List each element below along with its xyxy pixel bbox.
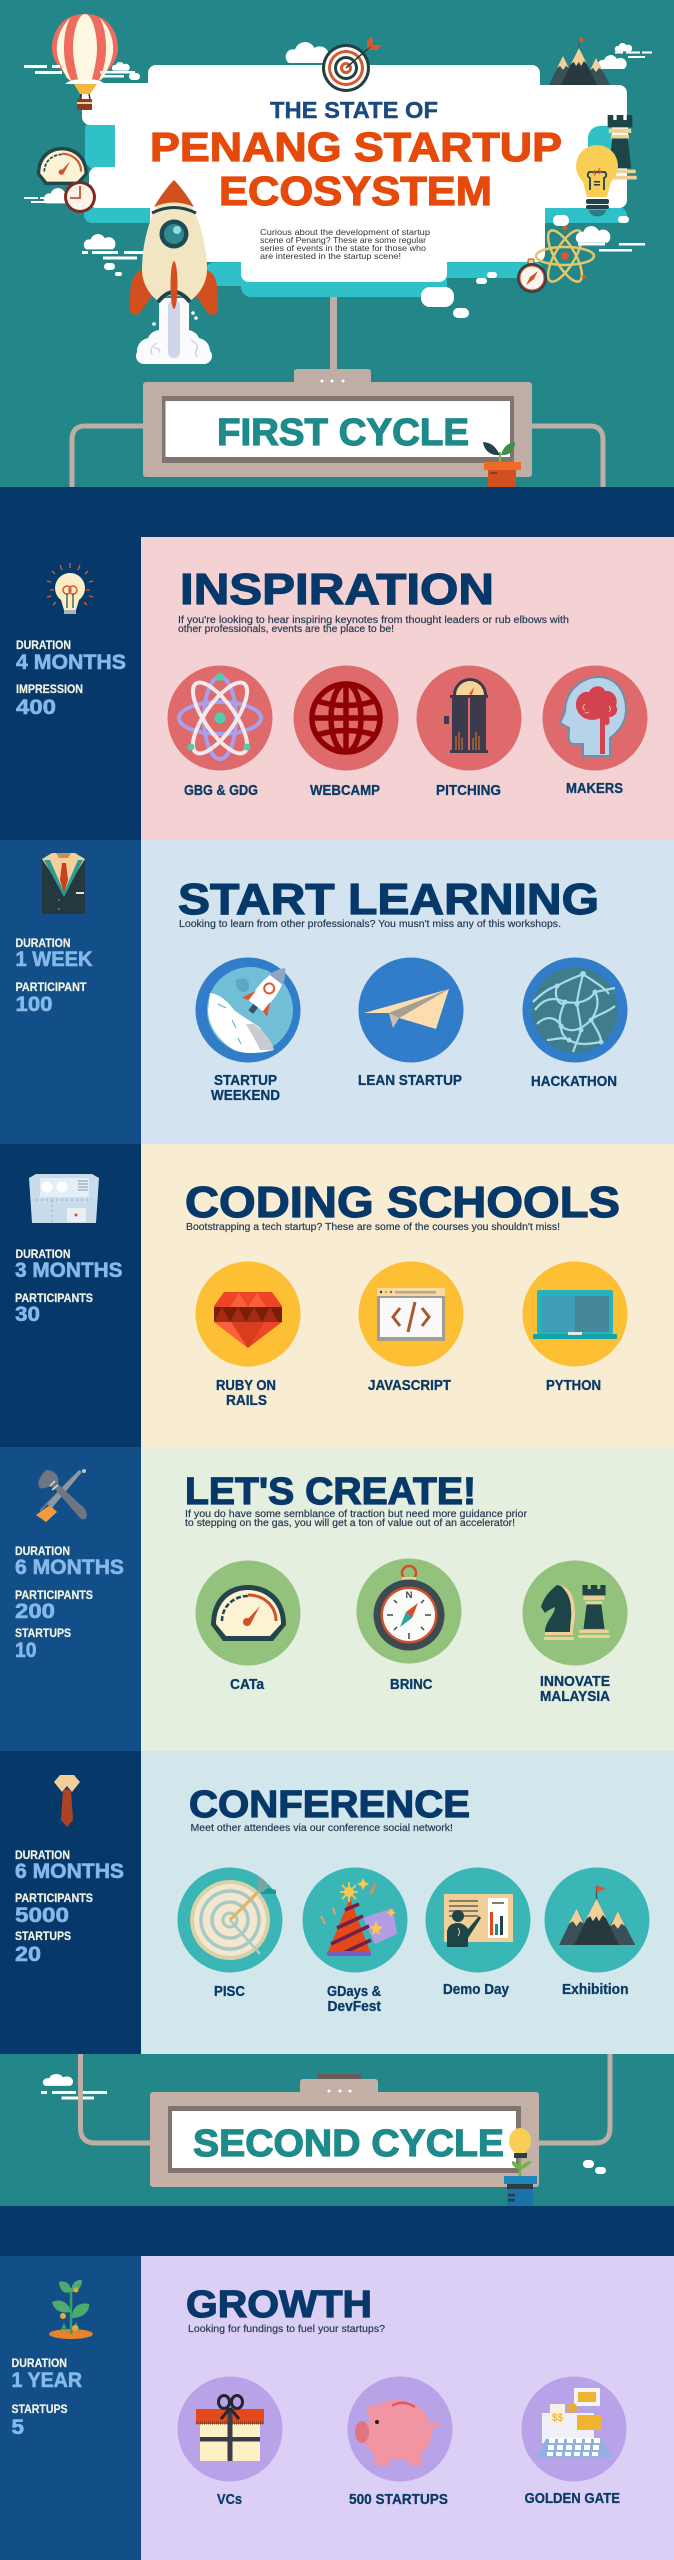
item: startup weekend rocket [196, 958, 300, 1062]
stats: start learning: 100 [16, 993, 52, 1016]
icon: bulb plant [504, 2128, 537, 2206]
heading: start learning: START LEARNING [178, 875, 599, 924]
intro text: are interested in the startup scene! [260, 251, 401, 261]
clouds near atom [421, 215, 645, 318]
stats: growth [12, 2358, 82, 2439]
stats: let's create: 6 MONTHS [15, 1556, 124, 1579]
label: INNOVATE [540, 1673, 610, 1690]
heading: let's create: LET'S CREATE! [185, 1471, 476, 1513]
stats: let's create: PARTICIPANTS [15, 1590, 93, 1602]
clouds near gauge [24, 188, 75, 203]
item: PISC target [178, 1868, 282, 1972]
clouds left of rocket [82, 234, 144, 276]
icon: atom [536, 226, 594, 286]
navy band [0, 2206, 674, 2256]
stats: let's create [15, 1546, 124, 1662]
heading: growth: GROWTH [186, 2284, 372, 2326]
icon: tools [36, 1469, 87, 1522]
description: let's create: If you do have some semblance of traction but need more guidance prior [185, 1509, 528, 1520]
icon: blueprint [29, 1174, 99, 1223]
description: let's create: to stepping on the gas, you will get a ton of value out of an accelerator! [185, 1518, 515, 1529]
item: makers head [542, 666, 648, 770]
item: golden gate register: $$ [552, 2412, 563, 2424]
stats: coding schools: DURATION [16, 1249, 70, 1261]
intro text: series of events in the state for those who [260, 243, 426, 253]
stats: start learning: 1 WEEK [16, 948, 92, 971]
label: GOLDEN GATE [524, 2490, 620, 2507]
description: inspiration [178, 615, 569, 635]
description: inspiration: other professionals, events are the place to be! [178, 624, 394, 635]
item: BRINC compass: N [406, 1590, 413, 1600]
icon: money plant [49, 2280, 93, 2339]
icon: rocket [130, 180, 218, 364]
icon: stopwatch [517, 259, 547, 293]
item: demo day presentation [426, 1868, 530, 1972]
panel: start learning [0, 840, 674, 1144]
clouds near balloon [24, 62, 140, 80]
label: BRINC [390, 1676, 433, 1693]
label: Demo Day [443, 1981, 510, 1998]
label: 500 STARTUPS [349, 2491, 448, 2508]
label: GBG & GDG [184, 782, 258, 799]
stats: let's create: STARTUPS [15, 1628, 71, 1640]
stats: let's create: 200 [15, 1600, 55, 1623]
label: RAILS [226, 1392, 267, 1409]
item: BRINC compass [356, 1558, 462, 1664]
second cycle heading: SECOND CYCLE [193, 2123, 504, 2165]
intro text: scene of Penang? These are some regular [260, 235, 426, 245]
stats: start learning [16, 938, 92, 1016]
stats: inspiration: 400 [16, 696, 56, 719]
icon: clock [64, 181, 96, 213]
stats: conference: PARTICIPANTS [15, 1893, 93, 1905]
description: conference: Meet other attendees via our conference social network! [190, 1823, 453, 1834]
item: ruby gem [196, 1262, 300, 1366]
second cycle blobs [583, 2160, 606, 2174]
second cycle cloud [41, 2074, 107, 2100]
icon: light bulb [576, 145, 618, 216]
stats: growth: 1 YEAR [12, 2369, 82, 2392]
item: innovate chess [522, 1560, 628, 1666]
label: DevFest [328, 1998, 381, 2015]
stats: inspiration: IMPRESSION [16, 684, 83, 696]
label: VCs [217, 2491, 242, 2508]
item: VCs gift [178, 2376, 282, 2482]
stats: inspiration: 4 MONTHS [16, 651, 126, 674]
description: growth: Looking for fundings to fuel your startups? [188, 2324, 385, 2335]
stats: inspiration: DURATION [16, 640, 71, 652]
label: HACKATHON [531, 1073, 617, 1090]
stats: conference [15, 1850, 124, 1966]
label [540, 1673, 610, 1705]
icon: suit [42, 853, 85, 914]
panel: coding schools [0, 1144, 674, 1447]
stats: growth: STARTUPS [12, 2404, 68, 2416]
stats: start learning: PARTICIPANT [16, 982, 86, 994]
stats: let's create: 10 [15, 1639, 36, 1662]
heading: conference: CONFERENCE [189, 1784, 470, 1826]
item: 500 startups piggy bank [348, 2376, 452, 2482]
icon: target top [286, 36, 382, 92]
item: golden gate register [522, 2376, 626, 2482]
title: penang startup ecosystem [150, 124, 562, 214]
heading: inspiration: INSPIRATION [180, 565, 494, 614]
stats: conference: 20 [15, 1943, 41, 1966]
title: penang startup ecosystem: ECOSYSTEM [219, 168, 492, 214]
label: WEBCAMP [310, 782, 380, 799]
icon: chess rook [603, 115, 637, 179]
icon: inspiration bulb [47, 563, 93, 614]
description: coding schools: Bootstrapping a tech startup? These are some of the courses you shouldn't miss! [186, 1222, 560, 1233]
item: GBG & GDG atom [168, 666, 272, 770]
label [211, 1072, 280, 1104]
panel: inspiration [0, 537, 674, 840]
stats: coding schools: 3 MONTHS [15, 1259, 122, 1282]
label: CATa [230, 1676, 265, 1693]
panel: growth [0, 2256, 674, 2560]
intro text: Curious about the development of startup [260, 227, 430, 237]
description: start learning: Looking to learn from other professionals? You musn't miss any of this workshops. [179, 919, 561, 930]
heading: coding schools: CODING SCHOOLS [185, 1178, 620, 1227]
panel: conference [0, 1751, 674, 2054]
label: JAVASCRIPT [368, 1377, 451, 1394]
stats: conference: DURATION [15, 1850, 70, 1862]
icon: tie [54, 1775, 80, 1827]
item: hackathon network [522, 958, 628, 1062]
label: MAKERS [566, 780, 623, 797]
item: webcamp globe [294, 666, 398, 770]
item: pitching elevator [416, 666, 522, 770]
label: MALAYSIA [540, 1688, 610, 1705]
second cycle background [0, 2054, 674, 2206]
label: PYTHON [546, 1377, 601, 1394]
label [216, 1377, 276, 1409]
item: python laptop [522, 1262, 628, 1366]
label: PITCHING [436, 782, 501, 799]
hero background [0, 0, 674, 487]
panel: let's create [0, 1447, 674, 1751]
icon: gauge top left [37, 147, 88, 185]
title: penang startup ecosystem: PENANG STARTUP [150, 124, 562, 170]
item: lean startup paper plane [358, 958, 464, 1062]
icon: potted plant [483, 442, 521, 487]
item: GDays party hat [302, 1868, 408, 1972]
label: STARTUP [214, 1072, 277, 1089]
description: let's create [185, 1509, 528, 1529]
stats: conference: 6 MONTHS [15, 1860, 124, 1883]
stats: conference: 5000 [15, 1904, 69, 1927]
icon: mountains top [549, 37, 652, 85]
speech board [84, 73, 628, 297]
first cycle sign [72, 297, 603, 487]
title: the state of: THE STATE OF [270, 97, 438, 123]
second cycle sign [80, 2054, 610, 2187]
label: RUBY ON [216, 1377, 276, 1394]
stats: growth: DURATION [12, 2358, 67, 2370]
description: inspiration: If you're looking to hear inspiring keynotes from thought leaders or rub elbows with [178, 615, 569, 626]
intro text [260, 227, 430, 261]
first cycle heading: FIRST CYCLE [217, 412, 469, 454]
stats: coding schools: PARTICIPANTS [15, 1293, 93, 1305]
stats: coding schools: 30 [15, 1303, 40, 1326]
navy band [0, 487, 674, 537]
label: PISC [214, 1983, 245, 2000]
item: CATa gauge [196, 1560, 300, 1666]
label: GDays & [327, 1983, 381, 2000]
stats: inspiration [16, 640, 126, 719]
item: javascript window [358, 1262, 464, 1366]
item: exhibition mountains [544, 1868, 650, 1972]
stats: coding schools [15, 1249, 122, 1326]
label: WEEKEND [211, 1087, 280, 1104]
icon: hot air balloon [52, 14, 118, 110]
label: Exhibition [562, 1981, 628, 1998]
stats: let's create: DURATION [15, 1546, 70, 1558]
stats: conference: STARTUPS [15, 1931, 71, 1943]
stats: start learning: DURATION [16, 938, 70, 950]
label: LEAN STARTUP [358, 1072, 462, 1089]
stats: growth: 5 [12, 2416, 24, 2439]
label [327, 1983, 381, 2015]
